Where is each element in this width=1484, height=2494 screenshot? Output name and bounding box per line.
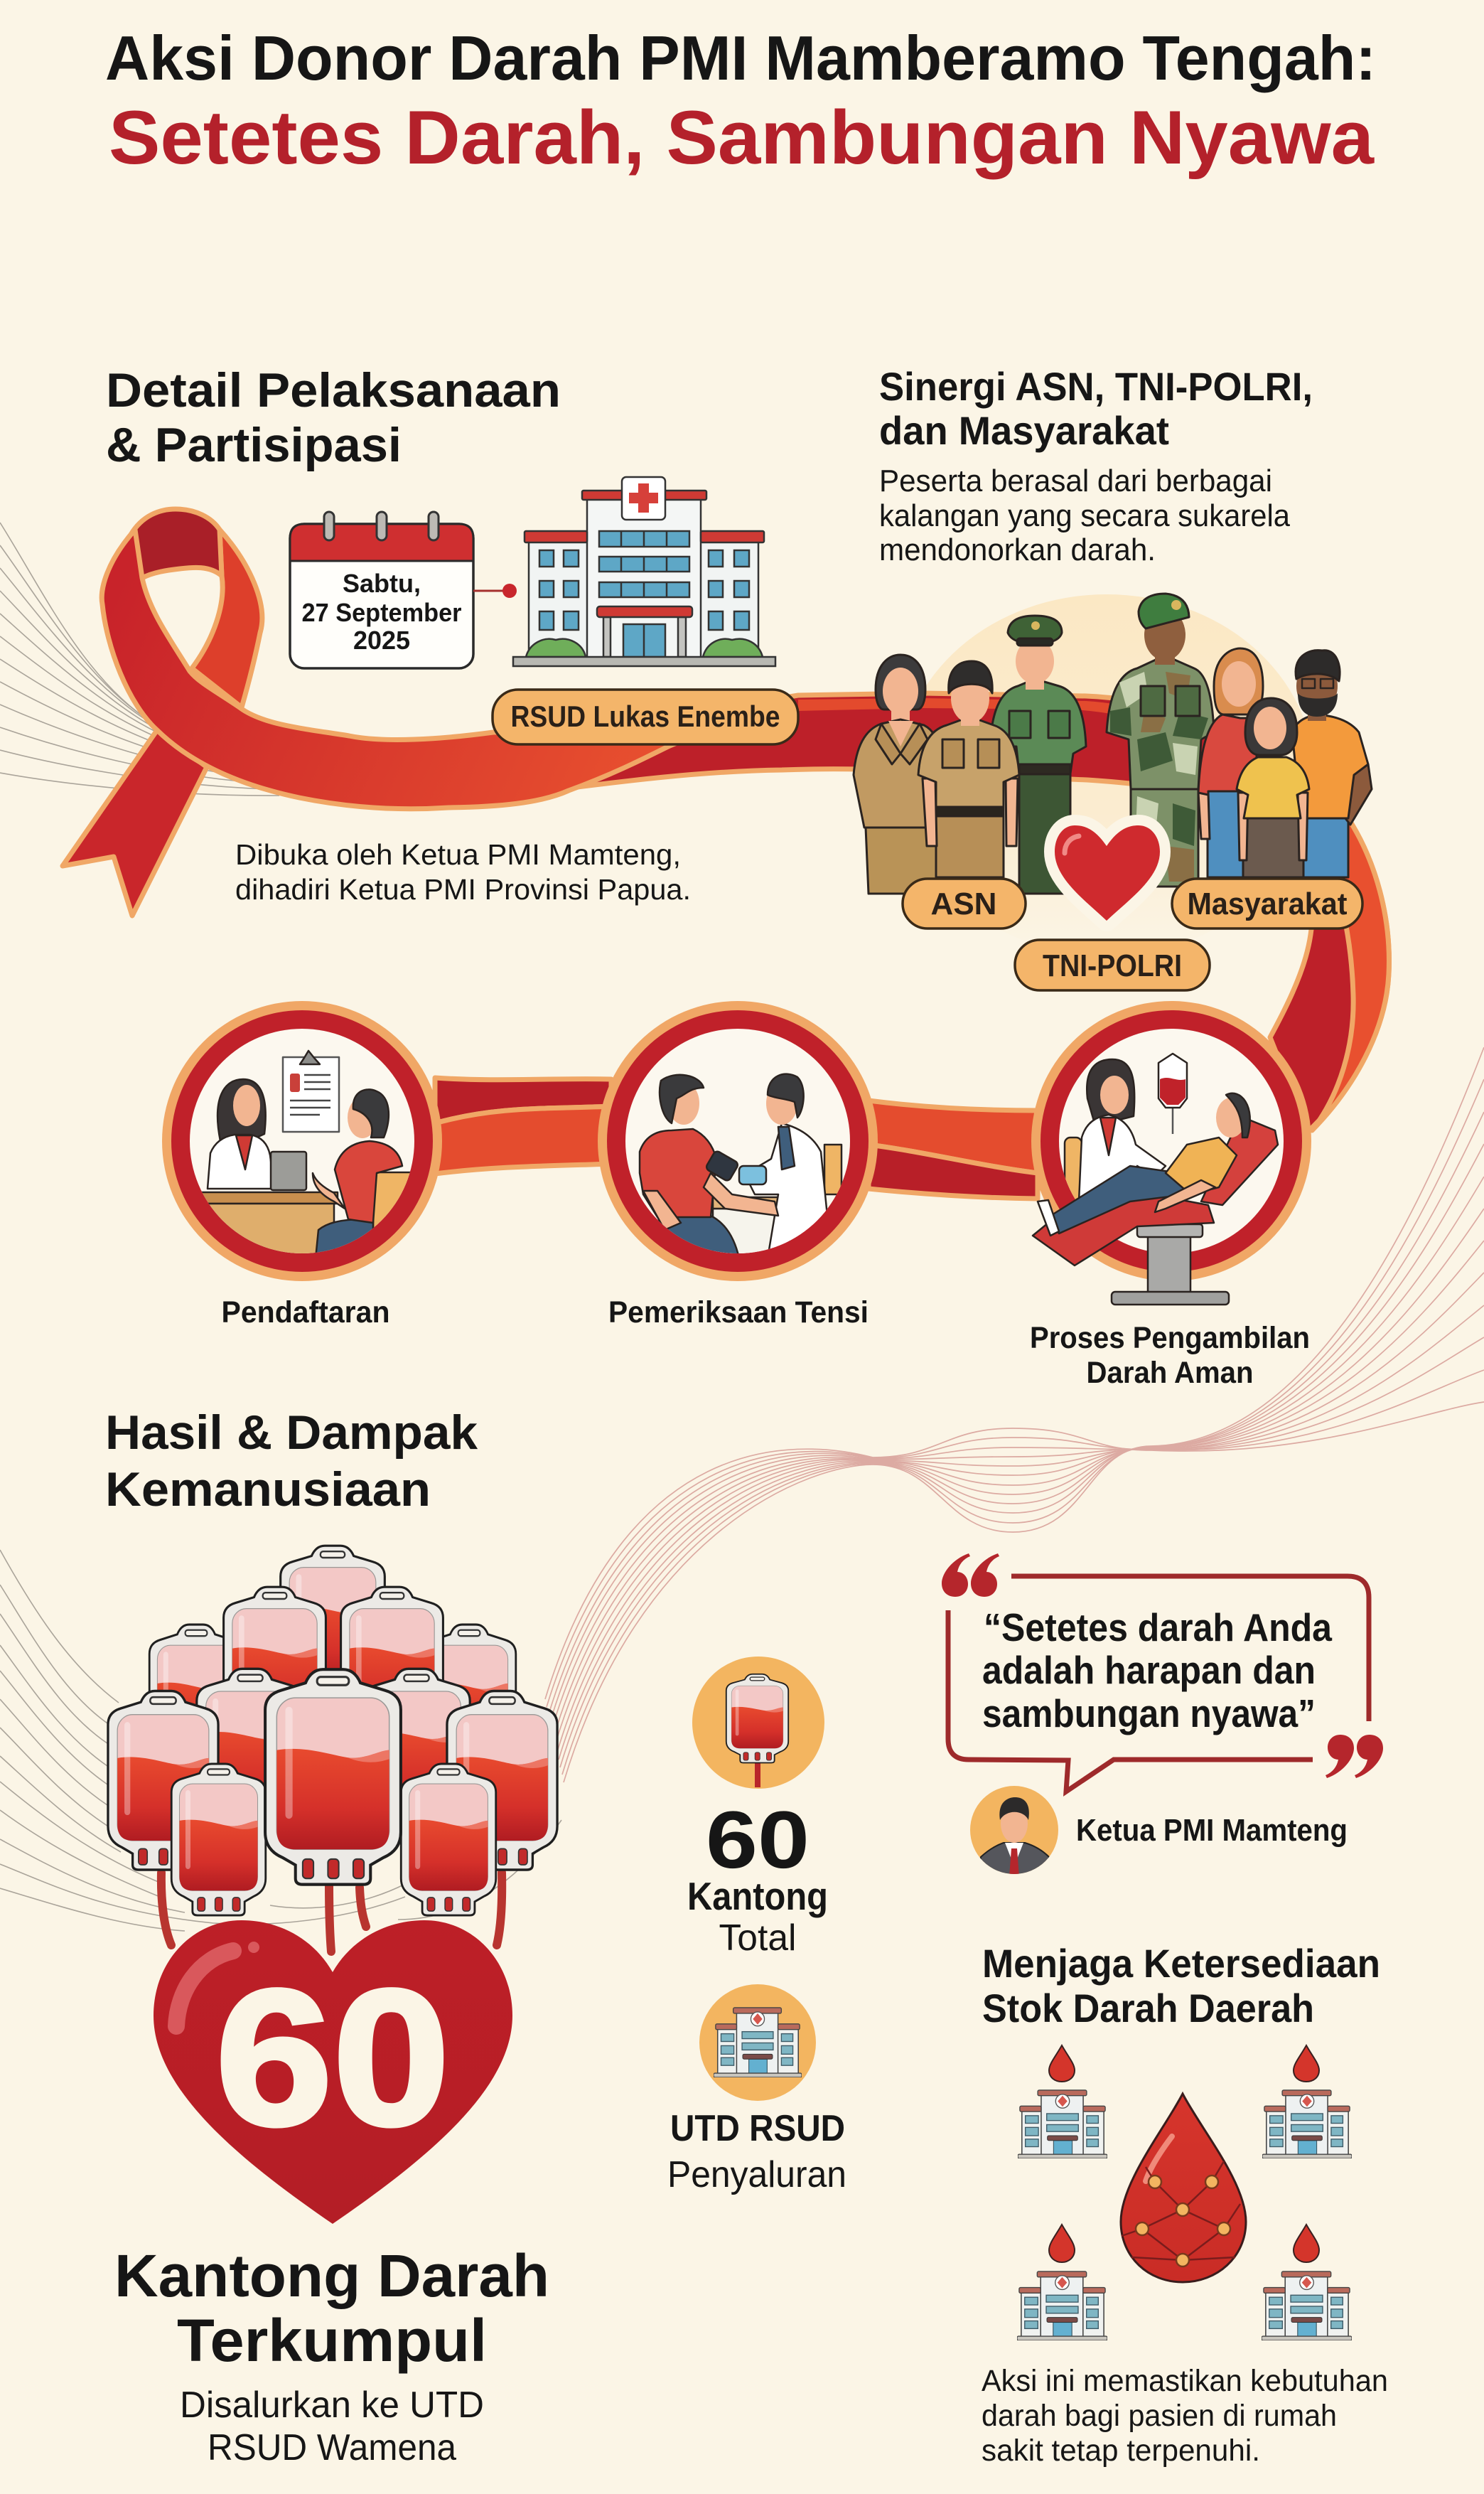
doctor at desk [208, 1079, 306, 1190]
badge: Masyarakat: Masyarakat [1187, 887, 1348, 921]
text: aksi ini memastikan: sakit tetap terpenuhi. [982, 2434, 1260, 2468]
quote text: adalah harapan dan [982, 1648, 1316, 1692]
text: peserta: kalangan yang secara sukarela [879, 498, 1291, 533]
icon: small heart [1055, 825, 1160, 921]
stat: UTD RSUD penyaluran [667, 2108, 846, 2195]
person: ASN woman [854, 655, 938, 894]
text: aksi ini memastikan: darah bagi pasien di rumah [982, 2399, 1337, 2433]
heading: sinergi: Sinergi ASN, TNI-POLRI, [879, 364, 1313, 409]
calendar date text: 2025 [353, 626, 410, 655]
text: aksi ini memastikan: Aksi ini memastikan kebutuhan [982, 2364, 1388, 2398]
calendar date text: Sabtu, [343, 569, 421, 598]
label: ketua PMI mamteng: Ketua PMI Mamteng [1076, 1813, 1348, 1848]
badge: TNI-POLRI: TNI-POLRI [1043, 948, 1182, 983]
person: ASN man [918, 661, 1019, 877]
text: kantong darah terkumpul: Terkumpul [177, 2307, 487, 2374]
ribbon: front main band [102, 530, 711, 809]
person: man in orange [1292, 651, 1372, 877]
ribbon: bright outer edge of arc [1312, 818, 1389, 1130]
donor seated [313, 1089, 417, 1258]
title [105, 23, 1376, 180]
big heart with 60: 60 [215, 1949, 450, 2166]
clipboard [283, 1051, 339, 1132]
stat: UTD RSUD penyaluran: Penyaluran [667, 2154, 846, 2195]
decorative wave lines: right sweep [545, 1047, 1484, 1782]
icon: blood bag in circle [692, 1657, 824, 1789]
connector: calendar to hospital [473, 584, 517, 598]
patient legs [1048, 1166, 1187, 1233]
chair back [1201, 1116, 1278, 1205]
ribbon: right strand of loop [192, 530, 262, 707]
heading: hasil dan dampak: Kemanusiaan [105, 1462, 431, 1516]
stat: 60 kantong total: Kantong [687, 1874, 828, 1918]
text: peserta: mendonorkan darah. [879, 532, 1156, 567]
chair seat [1033, 1194, 1214, 1265]
label: pendaftaran: Pendaftaran [222, 1295, 389, 1329]
connector band: circle 2 to 3 [869, 1101, 1038, 1199]
heading: detail pelaksanaan: & Partisipasi [106, 418, 402, 472]
stat: 60 kantong total: Total [719, 1917, 796, 1959]
doctor standing [739, 1074, 842, 1258]
ribbon: dark band running right [463, 693, 1389, 1132]
step circle: pendaftaran [162, 1001, 442, 1281]
badge: ASN [903, 879, 1026, 928]
stat: UTD RSUD penyaluran: UTD RSUD [670, 2108, 845, 2149]
badge: RSUD Lukas Enembe: RSUD Lukas Enembe [510, 700, 780, 733]
label: pemeriksaan tensi: Pemeriksaan Tensi [608, 1295, 869, 1329]
avatar: ketua PMI [970, 1786, 1058, 1877]
text: peserta: Peserta berasal dari berbagai [879, 464, 1272, 498]
quote text: sambungan nyawa” [982, 1691, 1316, 1735]
person: TNI soldier camouflage [1107, 594, 1214, 887]
small drop and hospital: bottom right [1262, 2225, 1352, 2340]
stat: 60 kantong total [687, 1795, 828, 1959]
text: kantong darah terkumpul: Disalurkan ke UTD [180, 2385, 484, 2426]
pale sun circle behind participants [899, 594, 1314, 956]
quote text: “Setetes darah Anda [984, 1605, 1332, 1649]
group of participants [854, 594, 1372, 894]
nurse [1065, 1059, 1166, 1216]
blood bag on stand [1158, 1054, 1187, 1134]
heading: hasil dan dampak [105, 1406, 478, 1516]
icon: hospital in circle [699, 1984, 816, 2101]
decorative wave lines: upper left [0, 523, 279, 796]
ribbon: upper highlight stripe [798, 698, 1151, 719]
icon: hospital [513, 477, 775, 666]
icon: large blood drop network [1121, 2094, 1246, 2282]
side table [713, 1197, 790, 1258]
connector band: circle 1 to 2 [435, 1078, 611, 1174]
heading: sinergi [879, 364, 1313, 453]
person: girl in yellow [1237, 698, 1309, 877]
title: Setetes Darah, Sambungan Nyawa [109, 95, 1375, 180]
badge: TNI-POLRI [1015, 940, 1210, 990]
stat: 60 kantong total: 60 [706, 1795, 810, 1885]
text: dibuka oleh: dihadiri Ketua PMI Provinsi Papua. [235, 873, 691, 906]
open quote mark [942, 1553, 999, 1597]
patient head [1216, 1098, 1246, 1138]
small drop and hospital: bottom left [1017, 2225, 1107, 2340]
calendar [290, 512, 473, 668]
ribbon: tail [63, 730, 207, 916]
text: kantong darah terkumpul: RSUD Wamena [208, 2427, 456, 2468]
heading: menjaga ketersediaan: Menjaga Ketersediaan [982, 1941, 1380, 1986]
small drop and hospital: top right [1262, 2045, 1352, 2158]
badge: ASN: ASN [931, 887, 996, 921]
quote text [982, 1605, 1332, 1735]
text: dibuka oleh [235, 838, 691, 906]
label: proses pengambilan: Proses Pengambilan [1030, 1321, 1310, 1355]
text: aksi ini memastikan [982, 2364, 1388, 2468]
decorative wave lines: lower left [0, 1550, 561, 1931]
step circle: pemeriksaan tensi [598, 1001, 878, 1281]
heading: detail pelaksanaan: Detail Pelaksanaan [106, 363, 561, 417]
text: dibuka oleh: Dibuka oleh Ketua PMI Mamteng, [235, 838, 681, 871]
blood bag tubes [161, 1873, 502, 1952]
speech bubble outline [948, 1576, 1369, 1792]
small drop and hospital: top left [1018, 2045, 1107, 2158]
chair pedestal [1112, 1224, 1229, 1305]
patient shoes [1038, 1200, 1059, 1236]
text: kantong darah terkumpul [114, 2242, 549, 2468]
seated patient [640, 1075, 778, 1258]
ribbon: dark loop top [131, 509, 222, 578]
heading: detail pelaksanaan [106, 363, 561, 472]
text: peserta [879, 464, 1291, 567]
label: proses pengambilan [1030, 1321, 1310, 1390]
desk [202, 1192, 338, 1253]
patient torso [1166, 1138, 1237, 1194]
heading: menjaga ketersediaan [982, 1941, 1380, 2030]
text: kantong darah terkumpul: Kantong Darah [114, 2242, 549, 2309]
heading: menjaga ketersediaan: Stok Darah Daerah [982, 1986, 1314, 2030]
big heart with 60 [154, 1920, 512, 2224]
label: proses pengambilan: Darah Aman [1086, 1356, 1254, 1390]
person: TNI officer [990, 616, 1086, 894]
step circle: proses pengambilan darah [1031, 1001, 1311, 1305]
badge: RSUD Lukas Enembe [493, 690, 798, 744]
red ribbon [63, 509, 1389, 1132]
title: Aksi Donor Darah PMI Mamberamo Tengah: [105, 23, 1376, 93]
heading: hasil dan dampak: Hasil & Dampak [105, 1406, 478, 1460]
calendar date text: 27 September [301, 598, 462, 627]
badge: Masyarakat [1172, 879, 1362, 928]
calendar date text [301, 569, 462, 655]
close quote mark [1326, 1735, 1383, 1778]
patient hair [1226, 1093, 1250, 1138]
patient arm [1155, 1180, 1215, 1212]
heading: sinergi: dan Masyarakat [879, 408, 1169, 453]
cluster of blood bags [108, 1546, 557, 1915]
patient on donor chair [1033, 1054, 1278, 1305]
person: woman in red [1198, 648, 1263, 877]
